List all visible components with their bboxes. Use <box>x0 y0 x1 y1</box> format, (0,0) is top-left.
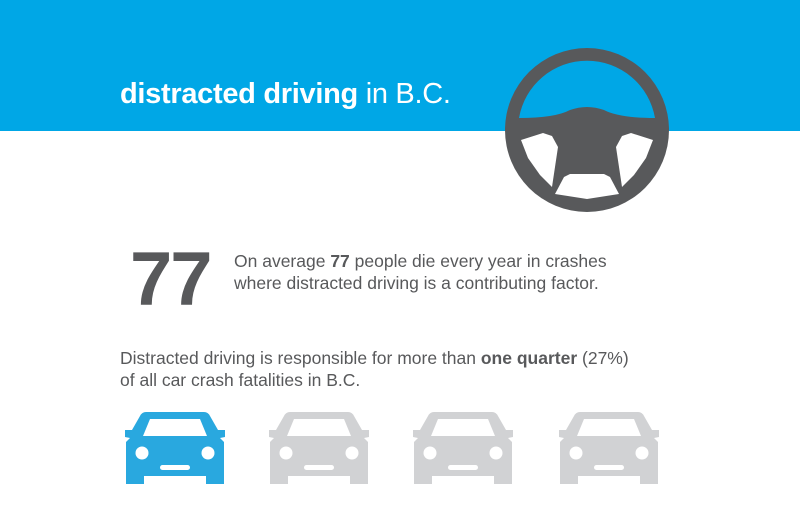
header band <box>0 0 800 131</box>
icon: steering wheel <box>505 48 669 212</box>
text: 77 description: On average 77 people die every year in crashes <box>234 251 607 271</box>
icon: grey car <box>413 412 513 484</box>
icon: blue car <box>125 412 225 484</box>
stat: 77: 77 <box>130 237 211 322</box>
car icons <box>125 412 659 484</box>
icon: grey car <box>559 412 659 484</box>
text: 77 description <box>234 251 607 293</box>
title: distracted driving in B.C. <box>120 78 451 110</box>
text: quarter: Distracted driving is responsible for more than one quarter (27%) <box>120 348 629 368</box>
icon: grey car <box>269 412 369 484</box>
text: 77 description: where distracted driving is a contributing factor. <box>234 273 599 293</box>
text: quarter: of all car crash fatalities in B.C. <box>120 370 360 390</box>
text: quarter <box>120 348 629 390</box>
